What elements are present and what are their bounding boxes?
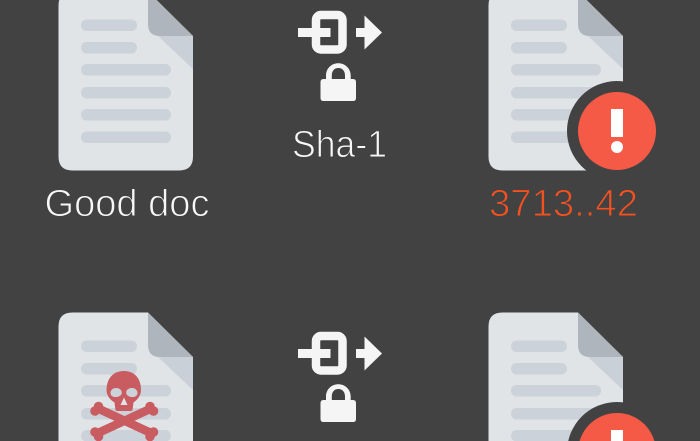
icon: skull and crossbones <box>90 371 158 441</box>
icon: alert badge, top row <box>567 81 667 181</box>
document: hash result, top row <box>488 0 623 170</box>
label: hash value: 3713..42 <box>489 183 638 225</box>
document: bad doc <box>58 312 193 441</box>
icon: sha-1 hash with lock, bottom row <box>298 336 382 422</box>
label: sha-1: Sha-1 <box>292 124 387 166</box>
document: good doc <box>58 0 193 170</box>
icon: alert badge, bottom row <box>567 402 667 441</box>
document: hash result, bottom row <box>488 312 623 441</box>
icon: sha-1 hash with lock, top row <box>298 15 382 101</box>
label: good doc: Good doc <box>44 183 210 225</box>
